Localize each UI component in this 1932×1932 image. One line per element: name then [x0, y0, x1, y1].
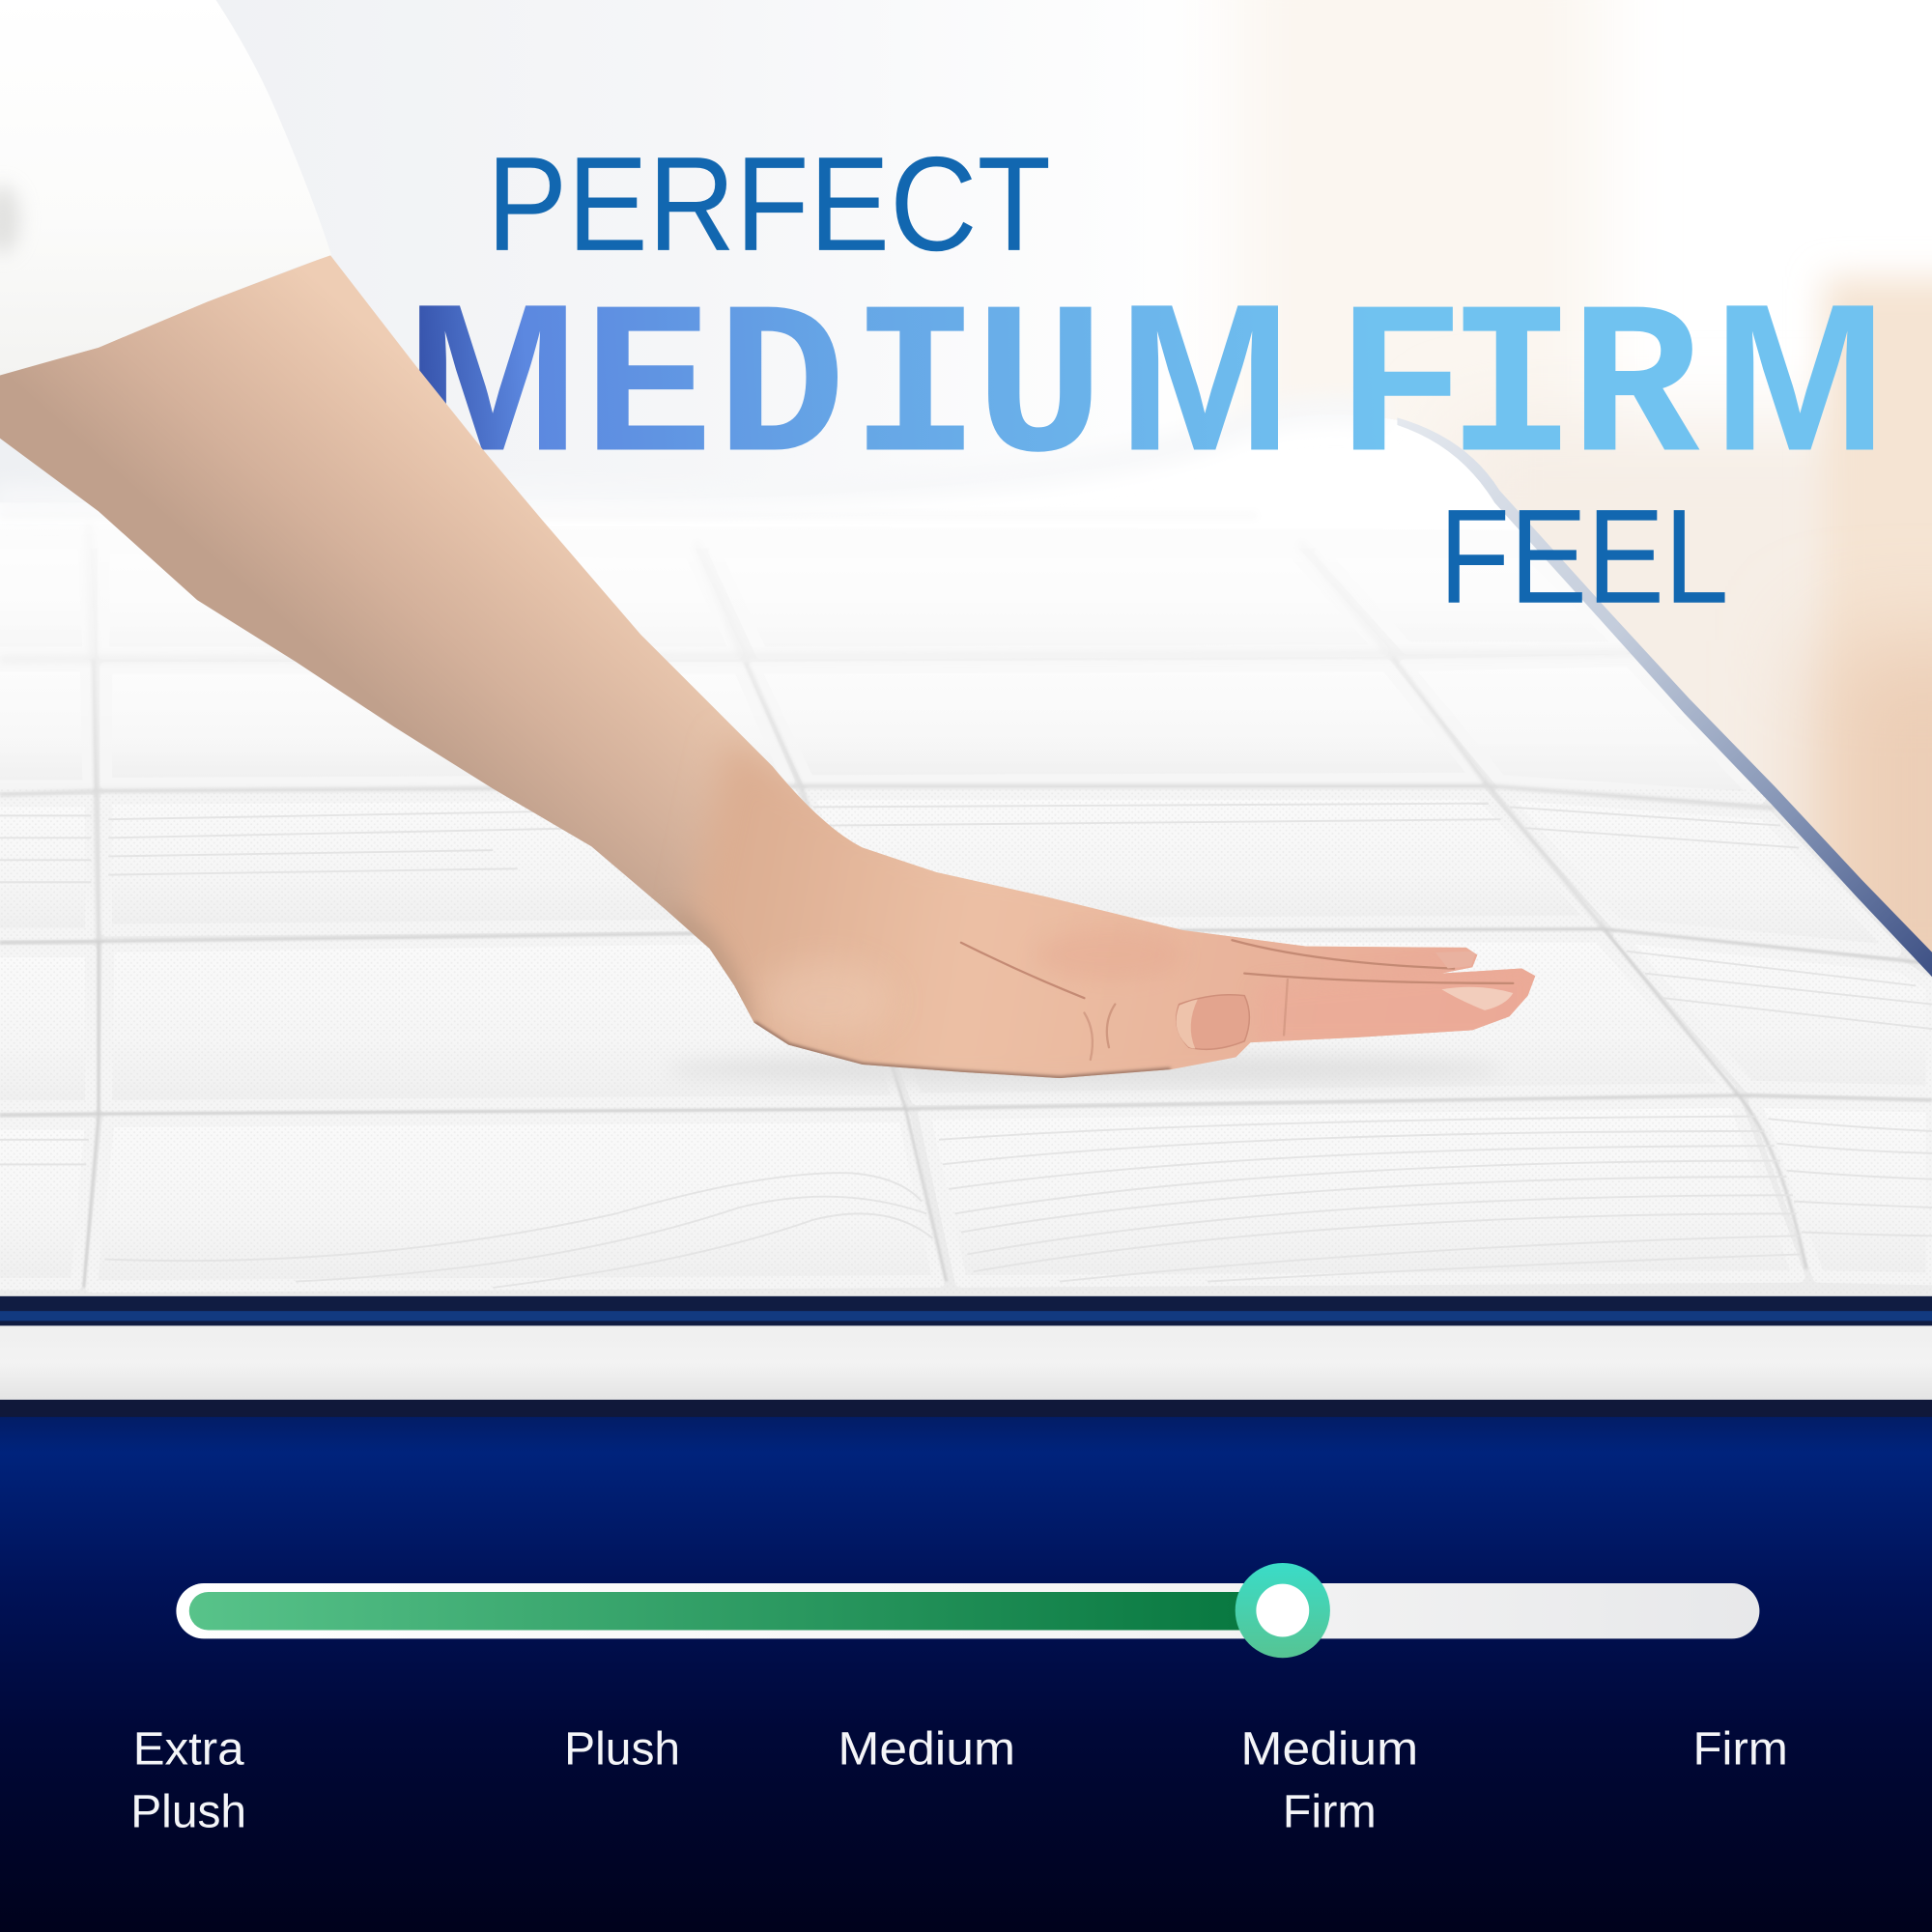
dent shadow around the hand	[666, 1054, 1503, 1086]
heading: MEDIUM FIRM: I	[1446, 270, 1577, 516]
heading: MEDIUM FIRM: U	[975, 270, 1105, 516]
heading: MEDIUM FIRM: F	[1336, 270, 1465, 516]
shirt sleeve	[0, 0, 331, 377]
background: blurred bedroom wall	[0, 0, 1932, 1417]
middle finger nail	[1435, 952, 1476, 969]
firmness scale labels	[130, 1723, 1788, 1838]
arm skin	[0, 246, 1559, 1096]
mattress blue piping edge	[1397, 417, 1932, 983]
mattress side band with navy zipper	[0, 1296, 1932, 1400]
label: Firm: Firm	[1693, 1723, 1788, 1776]
rear seams	[0, 515, 1638, 662]
label: Medium Firm	[1240, 1723, 1418, 1838]
wrist shadow	[674, 915, 753, 1016]
hand skin	[690, 739, 1565, 1096]
label: Medium Firm: Medium	[1240, 1723, 1418, 1776]
mattress top surface	[0, 394, 1932, 1306]
heading: MEDIUM FIRM: I	[850, 270, 980, 516]
navy top seam	[0, 1400, 1932, 1417]
label: Plush: Plush	[564, 1723, 680, 1776]
fingers tint	[1350, 989, 1530, 1037]
sleeve fold smudge	[0, 185, 19, 254]
heading: MEDIUM FIRM: M	[1118, 261, 1293, 495]
heading: PERFECT: PERFECT	[487, 129, 1051, 279]
heading: MEDIUM FIRM: E	[582, 270, 713, 516]
slider knob	[1236, 1563, 1330, 1658]
label: Extra Plush: Plush	[130, 1786, 246, 1838]
heading: MEDIUM FIRM: M	[406, 261, 580, 495]
slider fill	[189, 1592, 1247, 1631]
label: Extra Plush	[130, 1723, 246, 1838]
heading: MEDIUM FIRM: R	[1570, 270, 1700, 516]
heading: MEDIUM FIRM: D	[716, 270, 846, 516]
arm and hand	[0, 246, 1565, 1096]
index finger nail	[1441, 987, 1513, 1010]
front seams	[0, 929, 1932, 1288]
thumb nail	[1177, 995, 1249, 1049]
knit texture	[0, 788, 1932, 1293]
quilted panels	[0, 667, 1932, 1293]
under-hand shadow	[754, 1023, 1171, 1078]
palm heel highlight	[767, 967, 875, 1032]
label: Medium: Medium	[838, 1723, 1015, 1776]
firmness slider	[176, 1563, 1759, 1658]
thumb lunula	[1177, 999, 1198, 1048]
middle seams	[0, 657, 1775, 943]
heading: FEEL: FEEL	[1439, 482, 1729, 632]
heading: MEDIUM FIRM: M	[1713, 261, 1888, 495]
knuckle redness	[1057, 951, 1096, 960]
white fade over the back of the mattress	[80, 512, 1632, 711]
quilting rib and wave lines	[0, 804, 1932, 1288]
navy base panel	[0, 1400, 1932, 1932]
slider track	[176, 1583, 1759, 1638]
label: Medium Firm: Firm	[1283, 1786, 1377, 1838]
soft top edge of the mattress	[0, 411, 1386, 499]
white upper mattress blob	[961, 418, 1488, 493]
label: Extra Plush: Extra	[133, 1723, 244, 1776]
finger creases	[961, 940, 1513, 1060]
